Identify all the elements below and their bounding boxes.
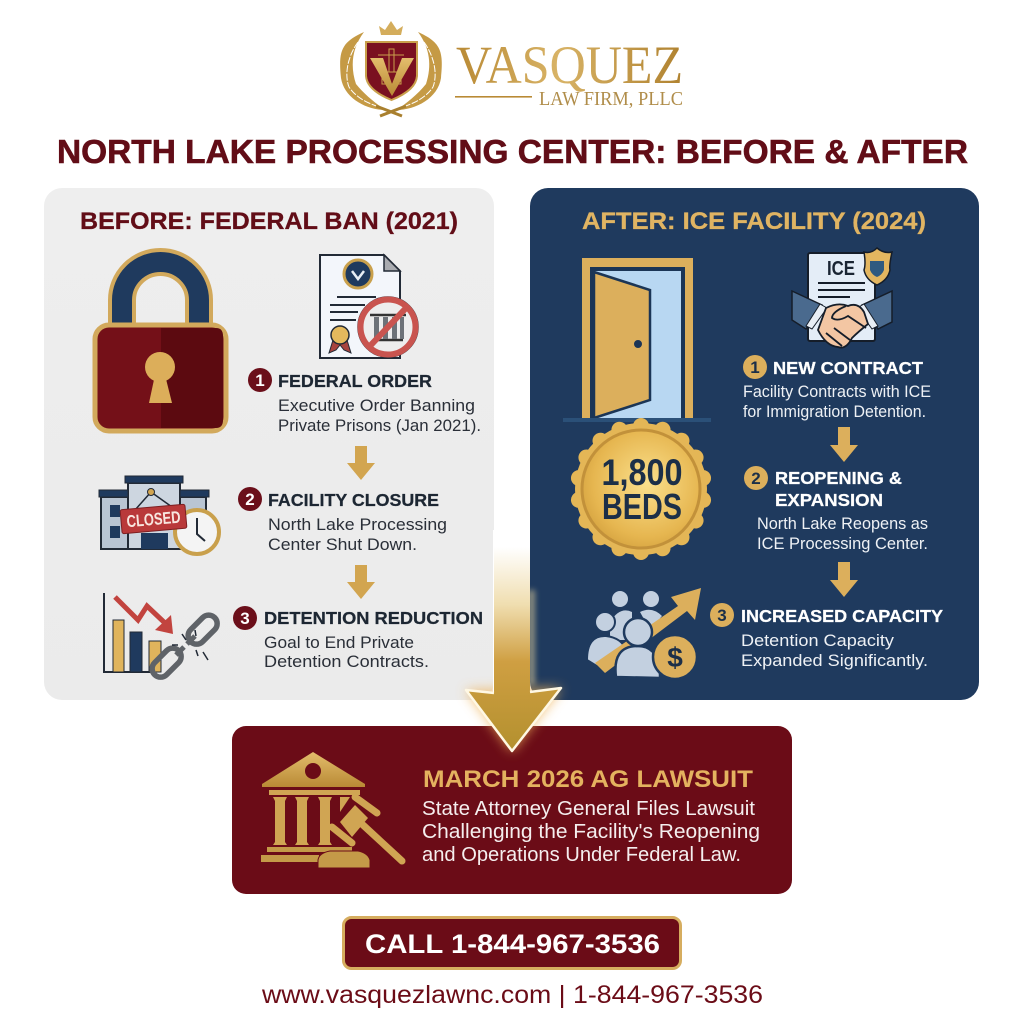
arrow: step 1 to 2 xyxy=(347,446,375,480)
step 2: facility closure: North Lake Processing xyxy=(268,516,447,534)
title: NORTH LAKE PROCESSING CENTER: BEFORE & AFTER xyxy=(57,133,968,170)
step 1: federal order: Executive Order Banning xyxy=(278,397,475,415)
icon: ice contract handshake xyxy=(792,248,892,348)
step 3: increased capacity: Detention Capacity xyxy=(741,632,895,650)
heading: march 2026 ag lawsuit: MARCH 2026 AG LAWSUIT xyxy=(423,766,753,793)
step 3: increased capacity: Expanded Significantly. xyxy=(741,652,928,670)
step 3: increased capacity xyxy=(710,603,943,670)
icon: open door xyxy=(563,258,711,422)
step 3: detention reduction: Goal to End Private xyxy=(264,634,414,652)
icon: laurel wreath xyxy=(340,32,442,116)
lawsuit description: Challenging the Facility's Reopening xyxy=(422,821,760,843)
lawsuit description: and Operations Under Federal Law. xyxy=(422,844,741,866)
badge: 1,800 beds: 1,800 xyxy=(602,452,682,493)
icon: padlock xyxy=(95,250,226,431)
step 1: new contract xyxy=(743,355,931,421)
icon: shield xyxy=(366,42,417,100)
icon: ice contract handshake: ICE xyxy=(827,258,855,280)
step 3: detention reduction: DETENTION REDUCTION xyxy=(264,608,483,628)
panel: before federal ban xyxy=(44,188,494,700)
badge: 1,800 beds: BEDS xyxy=(602,486,682,527)
badge: 1,800 beds xyxy=(570,418,712,560)
step 1: federal order: FEDERAL ORDER xyxy=(278,371,432,391)
step 3: detention reduction: Detention Contracts. xyxy=(264,653,429,671)
step 3: increased capacity: 3 xyxy=(717,606,727,625)
panel: after ice facility xyxy=(530,188,979,700)
step 2: reopening and expansion: North Lake Reopens as xyxy=(757,515,928,533)
arrow: step 2 to 3 xyxy=(347,565,375,599)
step 1: federal order: 1 xyxy=(255,371,265,390)
icon: falling chart and broken chain xyxy=(104,593,221,681)
step 2: reopening and expansion: REOPENING & xyxy=(775,468,902,488)
step 2: reopening and expansion xyxy=(744,466,928,553)
step 3: detention reduction: 3 xyxy=(240,609,250,628)
arrow: big gold down arrow xyxy=(465,530,562,752)
step 1: new contract: NEW CONTRACT xyxy=(773,358,923,378)
icon: courthouse and gavel xyxy=(261,752,402,868)
panel: march 2026 lawsuit xyxy=(232,726,792,894)
icon: closed building xyxy=(99,476,219,554)
lawsuit description xyxy=(422,798,760,866)
icon: closed building: CLOSED xyxy=(126,508,181,531)
heading: before: BEFORE: FEDERAL BAN (2021) xyxy=(80,208,458,235)
logo subtitle: LAW FIRM, PLLC xyxy=(539,88,683,110)
call button: CALL 1-844-967-3536 xyxy=(365,929,660,959)
arrow: step 2 to 3 xyxy=(830,562,858,597)
step 2: facility closure xyxy=(238,487,447,554)
heading: after: AFTER: ICE FACILITY (2024) xyxy=(582,208,926,235)
step 2: reopening and expansion: ICE Processing Center. xyxy=(757,535,928,553)
step 2: facility closure: 2 xyxy=(245,490,255,509)
step 2: reopening and expansion: EXPANSION xyxy=(775,490,883,510)
step 3: detention reduction xyxy=(233,606,483,671)
icon: executive order document xyxy=(320,255,418,358)
step 1: new contract: for Immigration Detention. xyxy=(743,403,926,421)
step 2: reopening and expansion: 2 xyxy=(751,469,761,488)
logo wordmark: VASQUEZ xyxy=(456,35,683,95)
arrow: step 1 to 2 xyxy=(830,427,858,462)
icon: people growth and dollar: $ xyxy=(667,642,683,673)
step 3: increased capacity: INCREASED CAPACITY xyxy=(741,606,943,626)
call button xyxy=(344,918,680,968)
step 1: new contract: 1 xyxy=(750,358,760,377)
step 1: federal order: Private Prisons (Jan 2021). xyxy=(278,417,481,435)
lawsuit description: State Attorney General Files Lawsuit xyxy=(422,798,755,820)
step 1: federal order xyxy=(248,368,481,435)
step 2: facility closure: FACILITY CLOSURE xyxy=(268,490,439,510)
footer contact line: www.vasquezlawnc.com | 1-844-967-3536 xyxy=(261,981,763,1009)
icon: people growth and dollar xyxy=(587,588,701,679)
step 1: new contract: Facility Contracts with ICE xyxy=(743,383,931,401)
icon: crown xyxy=(379,21,403,35)
step 2: facility closure: Center Shut Down. xyxy=(268,536,417,554)
logo: Vasquez Law Firm xyxy=(340,21,683,116)
